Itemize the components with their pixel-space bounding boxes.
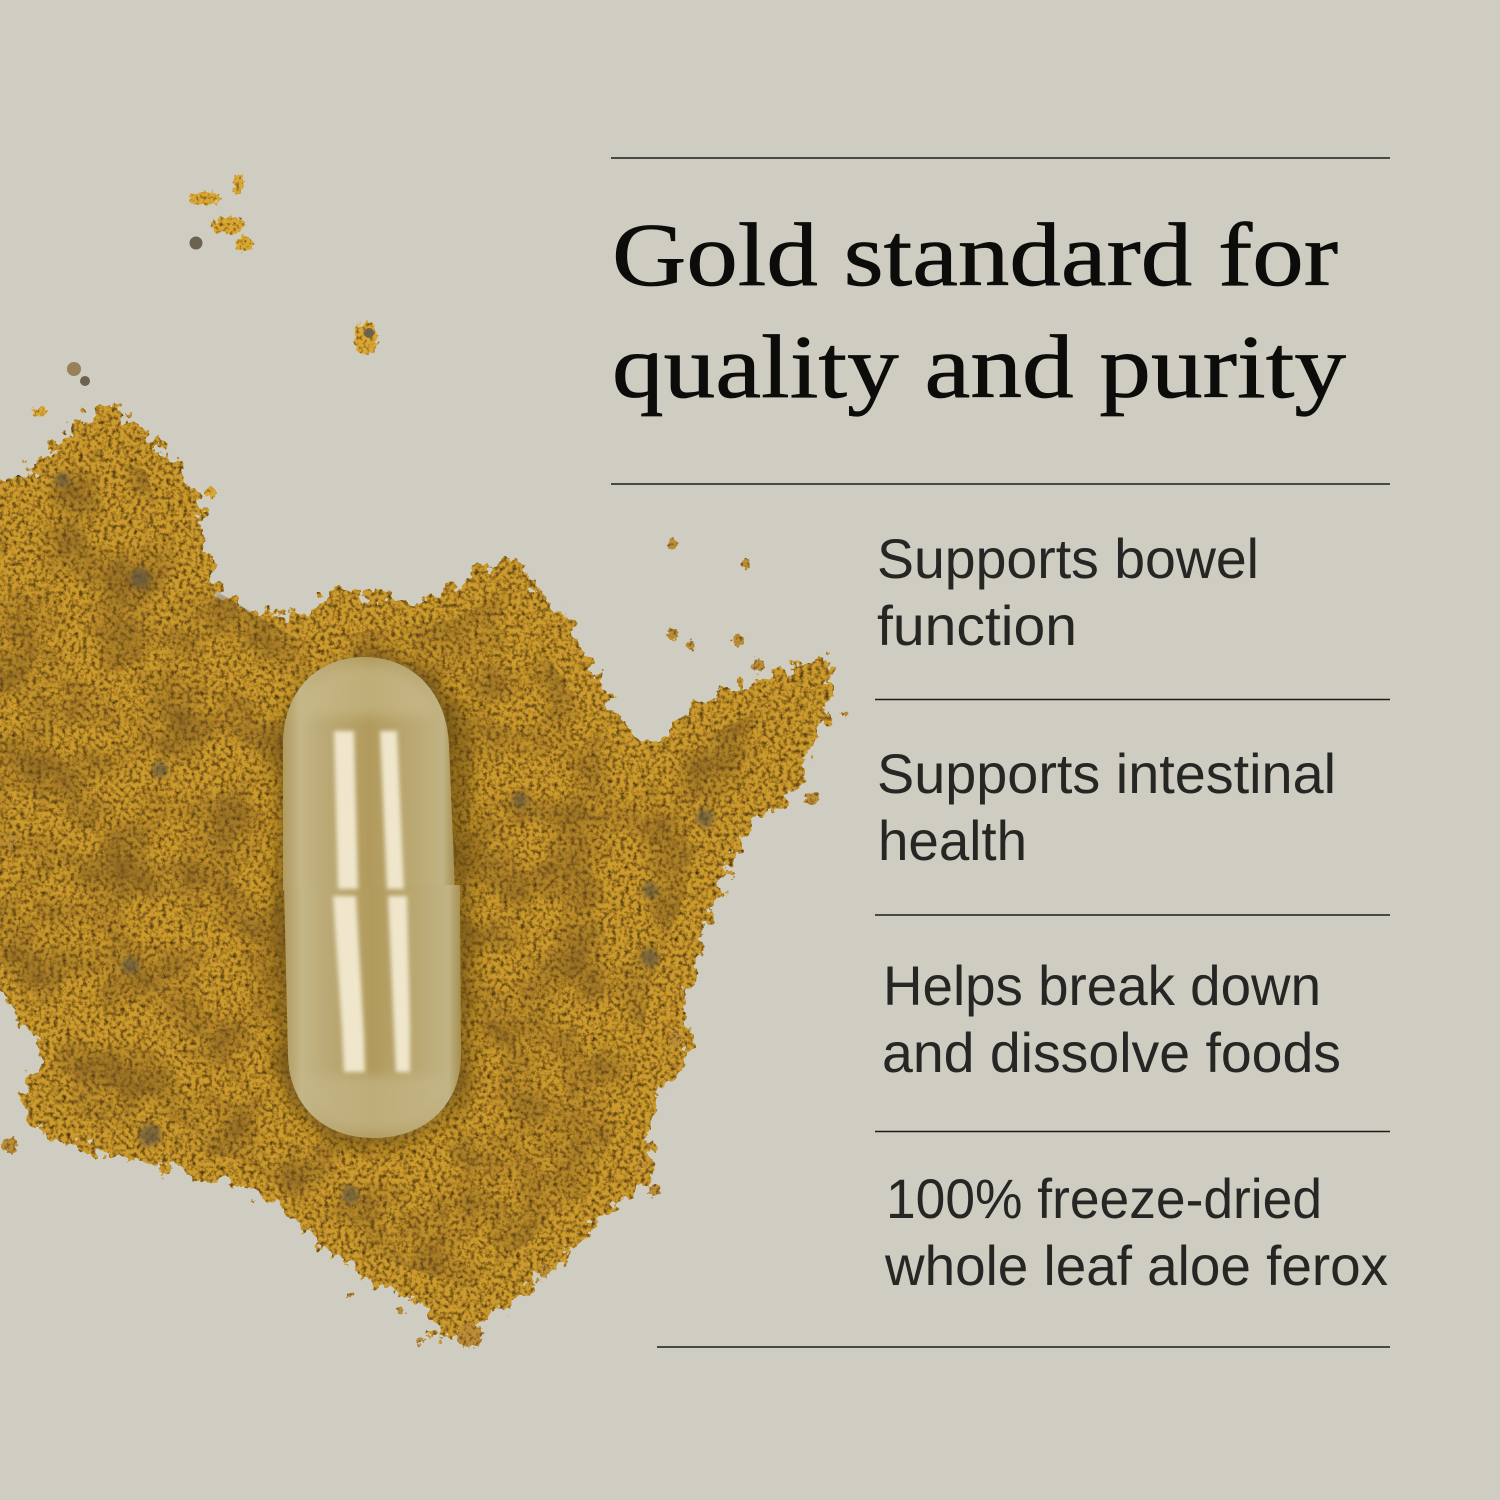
powder mound xyxy=(0,405,832,1345)
powder crumbs right and bottom xyxy=(2,539,848,1348)
title xyxy=(612,206,1346,417)
benefit: digestion of foods xyxy=(882,954,1341,1084)
capsule top dome xyxy=(296,664,436,716)
powder shading xyxy=(0,450,780,1290)
benefit: bowel function xyxy=(877,527,1259,657)
benefit: freeze-dried aloe xyxy=(884,1167,1388,1297)
dark specks in powder xyxy=(55,473,714,1204)
benefit: bowel function: Supports bowel xyxy=(877,527,1259,590)
capsule highlights xyxy=(333,731,410,1072)
benefit: intestinal health: Supports intestinal xyxy=(877,742,1336,805)
powder crumbs dark xyxy=(67,236,374,386)
benefit: intestinal health: health xyxy=(878,809,1027,872)
capsule bottom dome xyxy=(296,1076,450,1132)
powder pile illustration xyxy=(0,174,848,1348)
capsule xyxy=(283,657,461,1138)
benefit: bowel function: function xyxy=(877,594,1077,657)
benefit: intestinal health xyxy=(877,742,1336,872)
title: quality and purity xyxy=(612,318,1346,417)
benefit: digestion of foods: and dissolve foods xyxy=(882,1021,1341,1084)
divider: below title xyxy=(611,483,1390,485)
capsule upper shell xyxy=(283,657,455,890)
powder crumbs top xyxy=(31,174,378,498)
title: Gold standard for xyxy=(612,206,1338,305)
capsule lower shell xyxy=(284,885,461,1138)
capsule contact shadow xyxy=(276,660,472,1146)
benefit: digestion of foods: Helps break down xyxy=(883,954,1321,1017)
benefit: freeze-dried aloe: whole leaf aloe ferox xyxy=(884,1234,1388,1297)
divider: top xyxy=(611,157,1390,159)
benefit: freeze-dried aloe: 100% freeze-dried xyxy=(886,1167,1322,1230)
